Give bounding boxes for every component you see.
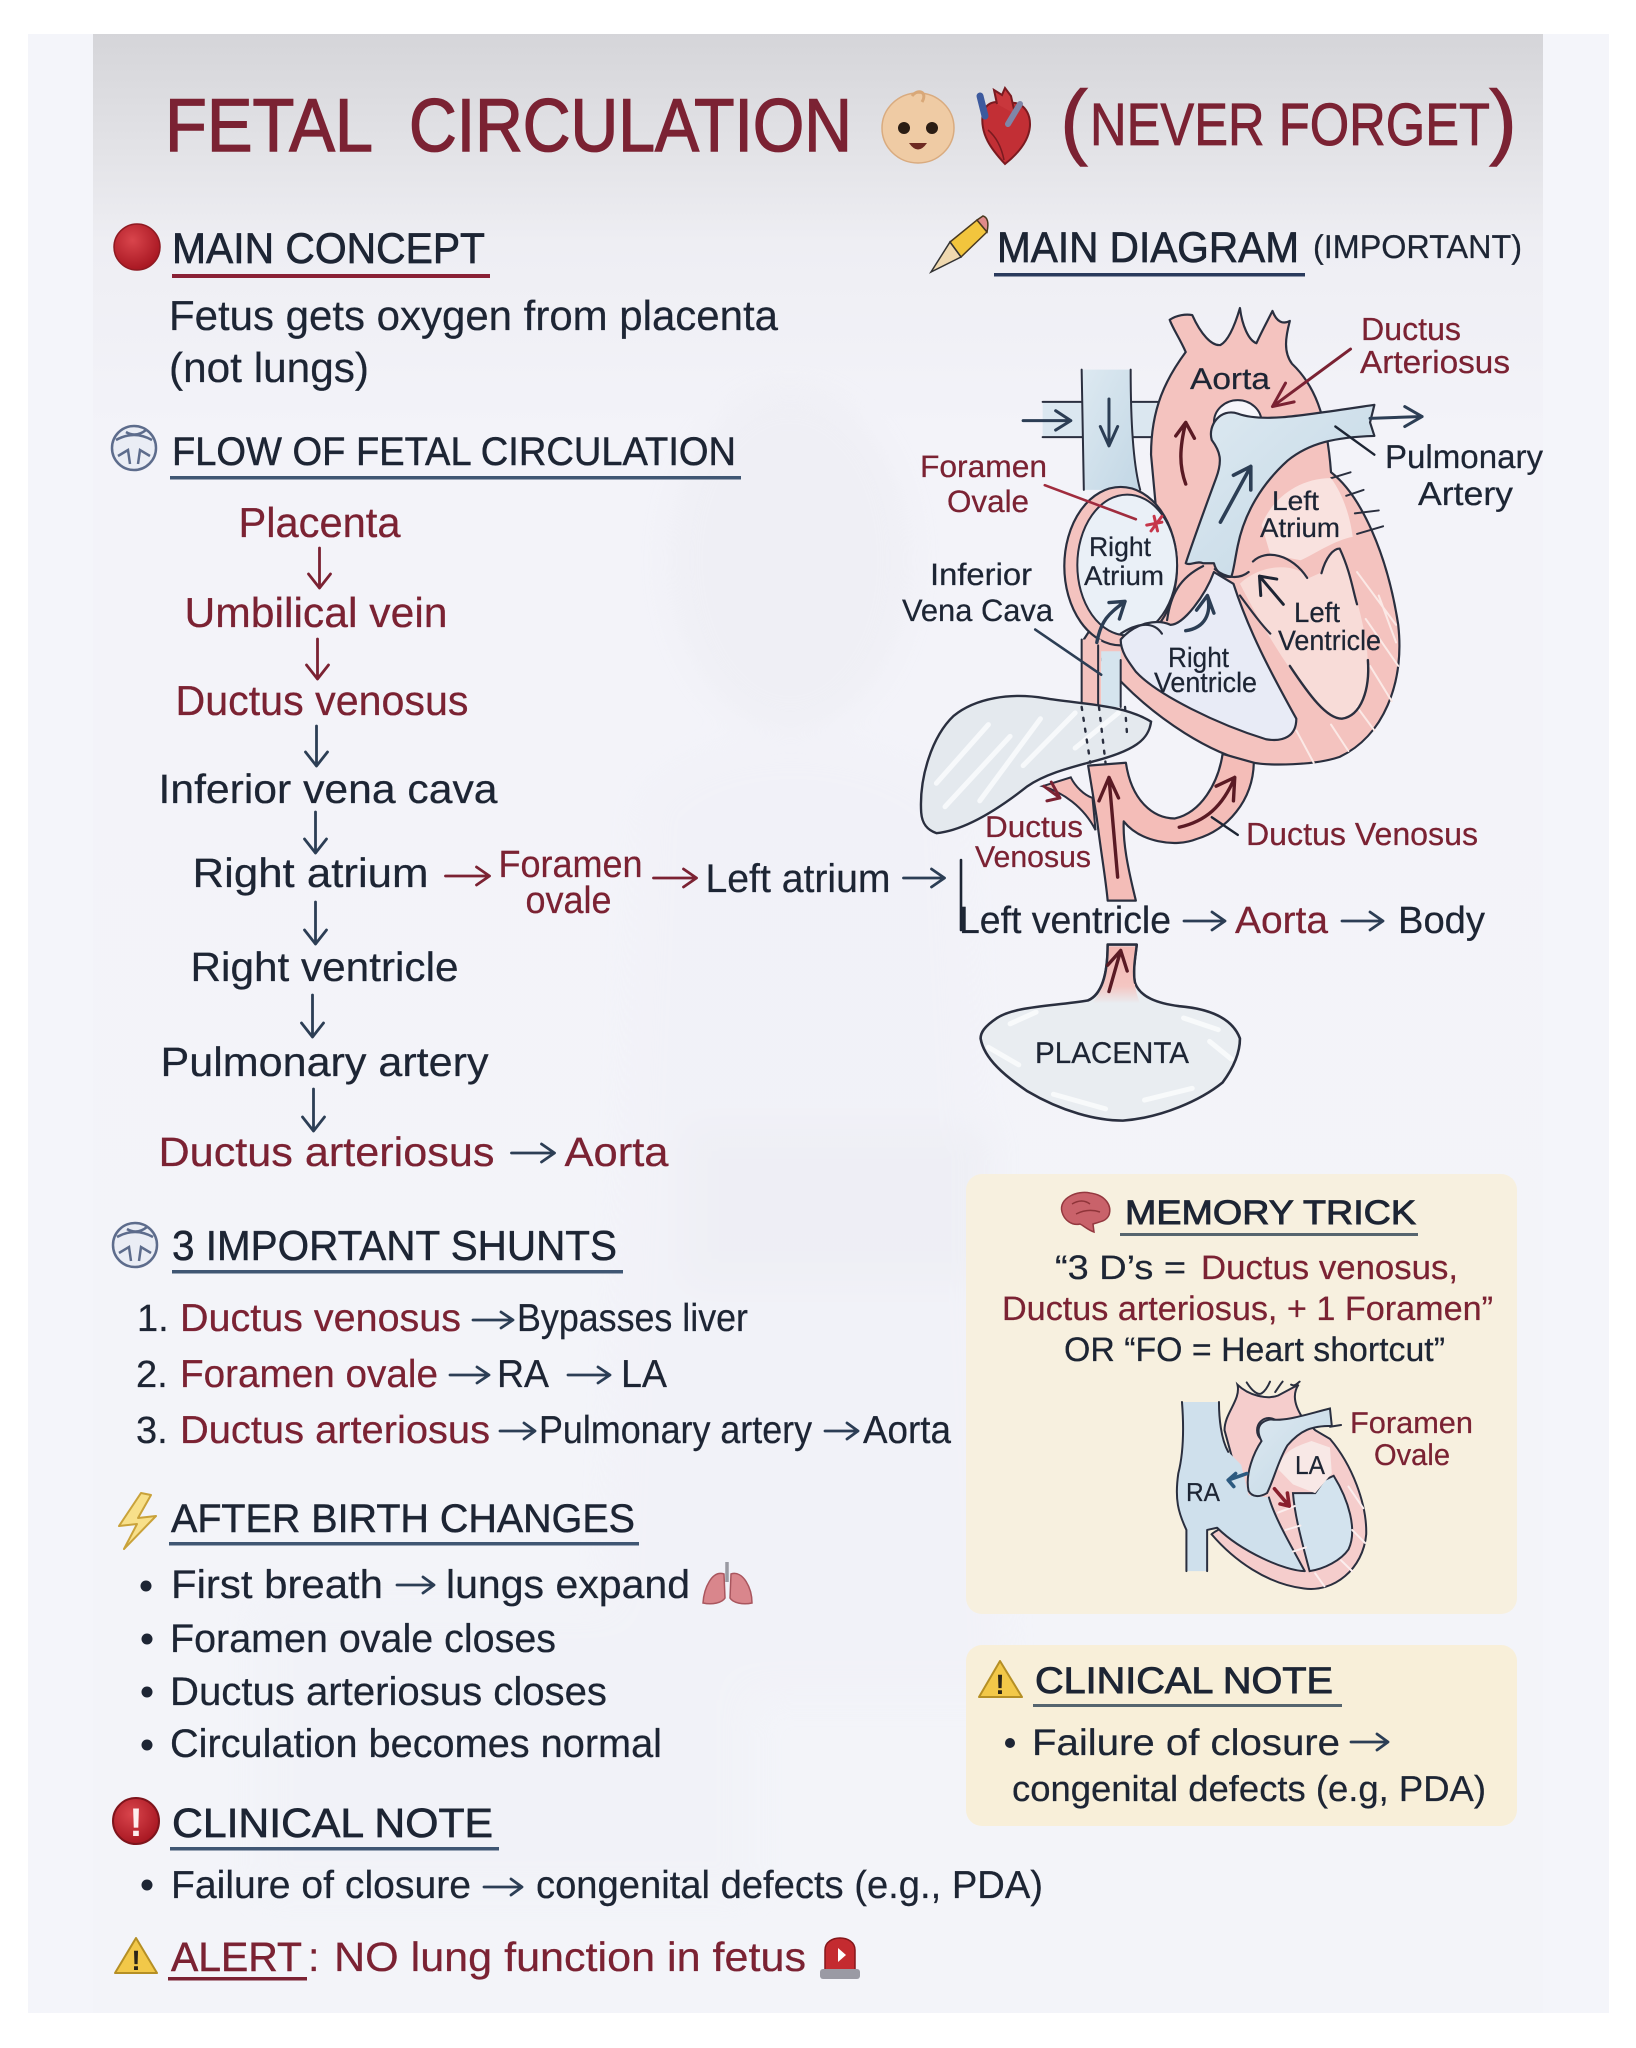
- arrow: ductus arteriosus to aorta: [512, 1144, 554, 1162]
- flow chart: fetal circulation steps: ovale: [526, 880, 612, 922]
- text: main concept body: (not lungs): [169, 344, 369, 391]
- superior vena cava: [1043, 370, 1160, 490]
- dotted vessels through liver: [1082, 707, 1127, 763]
- section: after birth changes: AFTER BIRTH CHANGES: [171, 1497, 635, 1541]
- right atrium: [1064, 487, 1177, 645]
- mini heart diagram: [1177, 1382, 1366, 1589]
- section: 3 important shunts: 3 IMPORTANT SHUNTS: [172, 1222, 617, 1269]
- section: clinical note (left): [113, 1798, 1043, 1907]
- list item: ductus arteriosus closes: Ductus arteriosus closes: [170, 1670, 607, 1714]
- heading: flow of fetal circulation: FLOW OF FETAL CIRCULATION: [172, 430, 736, 474]
- text: mnemonic: Ductus arteriosus, + 1 Foramen”: [1002, 1290, 1493, 1328]
- mini aorta and heart muscle: [1212, 1385, 1366, 1589]
- mini left atrium: [1278, 1441, 1332, 1493]
- diagram labels: Right: [1168, 642, 1229, 673]
- placenta: [981, 945, 1240, 1121]
- flow chart: fetal circulation steps: Foramen: [498, 844, 642, 886]
- diagram labels: [902, 311, 1543, 1070]
- aortic arch opening: [1214, 400, 1262, 445]
- arrow: right ventricle to pulmonary artery: [302, 995, 324, 1037]
- bracket and left ventricle to body line: Body: [1398, 900, 1485, 942]
- flow arrows in diagram: [1023, 399, 1422, 992]
- list item: first breath: [140, 1563, 690, 1607]
- umbilical trunk and loop: [1088, 754, 1254, 901]
- text: failure of closure: [1005, 1722, 1486, 1809]
- flow chart: fetal circulation steps: Ductus venosus: [176, 677, 468, 724]
- left atrium: [1262, 478, 1353, 560]
- heading: memory trick: MEMORY TRICK: [1125, 1194, 1416, 1232]
- inferior vena cava: [1082, 640, 1121, 710]
- icon: anatomical heart: [980, 88, 1030, 164]
- shunt 3: Pulmonary artery: [539, 1409, 812, 1452]
- text: mnemonic: [1002, 1249, 1493, 1369]
- flow chart: fetal circulation steps: [158, 499, 944, 1175]
- list item: foramen ovale closes: Foramen ovale closes: [170, 1617, 556, 1661]
- mini right atrium and ventricle: [1177, 1402, 1305, 1571]
- text: failure of closure: congenital defects (e.g, PDA): [1012, 1768, 1486, 1809]
- list item: failure of closure: Failure of closure: [171, 1864, 471, 1907]
- pulmonary artery: [1186, 405, 1374, 577]
- diagram labels: Vena Cava: [902, 593, 1054, 628]
- mini heart labels: RA: [1186, 1477, 1221, 1507]
- right ventricle: [1121, 572, 1296, 740]
- diagram labels: Inferior: [930, 557, 1032, 592]
- icon: warning triangle: [979, 1661, 1022, 1700]
- faint background photo of doctor: [255, 390, 1010, 1900]
- icon: siren: [820, 1938, 860, 1979]
- list item: failure of closure: [142, 1864, 1043, 1907]
- shunt 3: Ductus arteriosus: [180, 1409, 490, 1452]
- shunt 2: LA: [621, 1353, 667, 1396]
- icon: red circle: [114, 224, 160, 270]
- panel: clinical note (right): [966, 1645, 1517, 1826]
- icon: pencil: [931, 216, 988, 272]
- panel: memory trick: [966, 1174, 1517, 1614]
- icon: lightning bolt: [119, 1493, 156, 1549]
- mini heart labels: Ovale: [1374, 1439, 1450, 1472]
- title: (: [1060, 73, 1088, 167]
- title: FETAL: [165, 83, 373, 167]
- myocardium hatching: [1296, 572, 1398, 763]
- diagram labels: Ductus: [1361, 311, 1461, 347]
- mini aortic notches: [1247, 1382, 1300, 1394]
- flow chart: fetal circulation steps: Right ventricle: [190, 944, 458, 990]
- diagram labels: Venosus: [975, 841, 1091, 874]
- diagram labels: Ovale: [947, 484, 1029, 519]
- leader lines: [1035, 349, 1374, 835]
- mini muscle hatching: [1278, 1487, 1365, 1586]
- arrow: ductus venosus to IVC: [306, 726, 328, 766]
- alert line: :: [308, 1934, 319, 1980]
- mini heart labels: LA: [1295, 1450, 1326, 1480]
- shunt 1: Bypasses liver: [517, 1297, 748, 1340]
- icon: lungs: [703, 1562, 752, 1604]
- pulmonary veins: [1331, 472, 1383, 534]
- shunt 1: Ductus venosus: [180, 1297, 461, 1340]
- arrow: pulmonary artery to ductus arteriosus: [302, 1089, 324, 1131]
- icon: warning triangle: !: [995, 1669, 1005, 1700]
- text: failure of closure: Failure of closure: [1032, 1722, 1340, 1763]
- flow chart: fetal circulation steps: Ductus arteriosus: [158, 1129, 494, 1175]
- shunt 3: [136, 1409, 951, 1452]
- mini heart labels: [1186, 1407, 1473, 1507]
- text: main concept body: Fetus gets oxygen from placenta: [169, 292, 779, 339]
- branch to liver: [1043, 777, 1096, 830]
- text: mnemonic: OR “FO = Heart shortcut”: [1064, 1331, 1445, 1369]
- diagram labels: Ventricle: [1154, 667, 1257, 698]
- shunt 3: Aorta: [863, 1409, 951, 1452]
- shunt 2: Foramen ovale: [180, 1353, 438, 1396]
- flow chart: fetal circulation steps: Pulmonary artery: [160, 1039, 489, 1085]
- heading: main diagram: [994, 224, 1522, 276]
- mini pulmonary artery: [1248, 1409, 1332, 1496]
- list item: first breath: First breath: [171, 1563, 383, 1607]
- icon: red exclamation: !: [129, 1801, 143, 1845]
- shunt 2: [136, 1353, 667, 1396]
- section: after birth changes: [119, 1493, 752, 1766]
- flow chart: fetal circulation steps: Right atrium: [192, 850, 428, 896]
- left ventricle: [1240, 549, 1368, 719]
- mini aortic opening: [1257, 1418, 1281, 1442]
- arrow: umbilical vein to ductus venosus: [306, 639, 328, 679]
- alert line: ALERT: [171, 1934, 302, 1980]
- diagram labels: Aorta: [1190, 363, 1270, 396]
- mini arrows: [1228, 1474, 1247, 1487]
- icon: baby face: [882, 92, 954, 163]
- liver: [921, 696, 1151, 833]
- diagram labels: Artery: [1418, 475, 1514, 512]
- icon: shunts symbol: [113, 1223, 157, 1267]
- title: CIRCULATION: [409, 83, 852, 167]
- text: mnemonic: Ductus venosus,: [1201, 1249, 1458, 1287]
- icon: red exclamation: [113, 1798, 159, 1845]
- diagram labels: Pulmonary: [1385, 438, 1543, 475]
- title: ): [1489, 73, 1517, 167]
- main heart diagram: [921, 308, 1422, 1121]
- icon: warning triangle: !: [131, 1945, 141, 1976]
- left ventricle apex curve: [1290, 660, 1368, 719]
- heading: clinical note: CLINICAL NOTE: [1035, 1660, 1333, 1701]
- text: mnemonic: “3 D’s =: [1055, 1249, 1186, 1287]
- shunt 1: [137, 1297, 748, 1340]
- flow chart: fetal circulation steps: Left atrium: [706, 857, 890, 901]
- icon: flow symbol: [112, 426, 156, 470]
- section: 3 important shunts: [113, 1222, 951, 1452]
- heart valves: [1121, 549, 1357, 634]
- diagram labels: Arteriosus: [1360, 344, 1510, 380]
- heading: main concept: MAIN CONCEPT: [172, 225, 485, 273]
- flow chart: fetal circulation steps: Inferior vena cava: [158, 766, 498, 812]
- liver texture: [936, 713, 1119, 807]
- diagram labels: Atrium: [1260, 513, 1340, 543]
- diagram labels: Right: [1089, 532, 1151, 562]
- arrow: right atrium to foramen ovale: [446, 867, 490, 885]
- diagram labels: Ductus: [985, 811, 1083, 844]
- alert line: [115, 1934, 860, 1980]
- diagram labels: Foramen: [920, 449, 1047, 484]
- alert line: NO lung function in fetus: [334, 1934, 806, 1980]
- icon: brain: [1061, 1192, 1110, 1232]
- mini heart labels: Foramen: [1350, 1407, 1473, 1440]
- shunt 3: 3.: [136, 1410, 168, 1452]
- diagram labels: Ventricle: [1278, 625, 1381, 656]
- bracket and left ventricle to body line: Left ventricle: [959, 900, 1171, 942]
- arrow: placenta to umbilical vein: [308, 548, 330, 588]
- title: NEVER FORGET: [1090, 91, 1490, 158]
- title: [165, 73, 1517, 167]
- shunt 2: RA: [497, 1353, 549, 1396]
- icon: warning triangle: [115, 1938, 157, 1976]
- diagram labels: Left: [1294, 597, 1340, 628]
- heading: main diagram: (IMPORTANT): [1313, 228, 1522, 265]
- shunt 1: 1.: [137, 1298, 169, 1340]
- arrow: foramen ovale to left atrium: [654, 869, 696, 887]
- arrow: left atrium to bracket: [904, 869, 944, 887]
- diagram labels: Left: [1272, 486, 1320, 516]
- flow chart: fetal circulation steps: Placenta: [238, 499, 401, 546]
- flow chart: fetal circulation steps: Aorta: [564, 1129, 669, 1175]
- shunt 2: 2.: [136, 1354, 168, 1396]
- arrow: right atrium to right ventricle: [304, 902, 326, 944]
- list item: first breath: lungs expand: [446, 1563, 690, 1607]
- mini left ventricle: [1293, 1476, 1352, 1571]
- bracket and left ventricle to body line: Aorta: [1235, 900, 1329, 942]
- flow chart: fetal circulation steps: Umbilical vein: [184, 589, 448, 636]
- diagram labels: Ductus Venosus: [1246, 816, 1478, 852]
- section: clinical note (left): CLINICAL NOTE: [172, 1800, 493, 1846]
- arrow: IVC to right atrium: [304, 812, 326, 853]
- text: main concept body: [169, 292, 779, 391]
- list item: circulation becomes normal: Circulation becomes normal: [170, 1722, 662, 1766]
- heart body and aorta: [1084, 308, 1399, 764]
- diagram labels: PLACENTA: [1035, 1037, 1189, 1070]
- diagram labels: Atrium: [1084, 561, 1164, 591]
- heading: main diagram: MAIN DIAGRAM: [997, 224, 1299, 272]
- bracket and left ventricle to body line: [959, 860, 1485, 942]
- list item: failure of closure: congenital defects (e.g., PDA): [536, 1864, 1043, 1907]
